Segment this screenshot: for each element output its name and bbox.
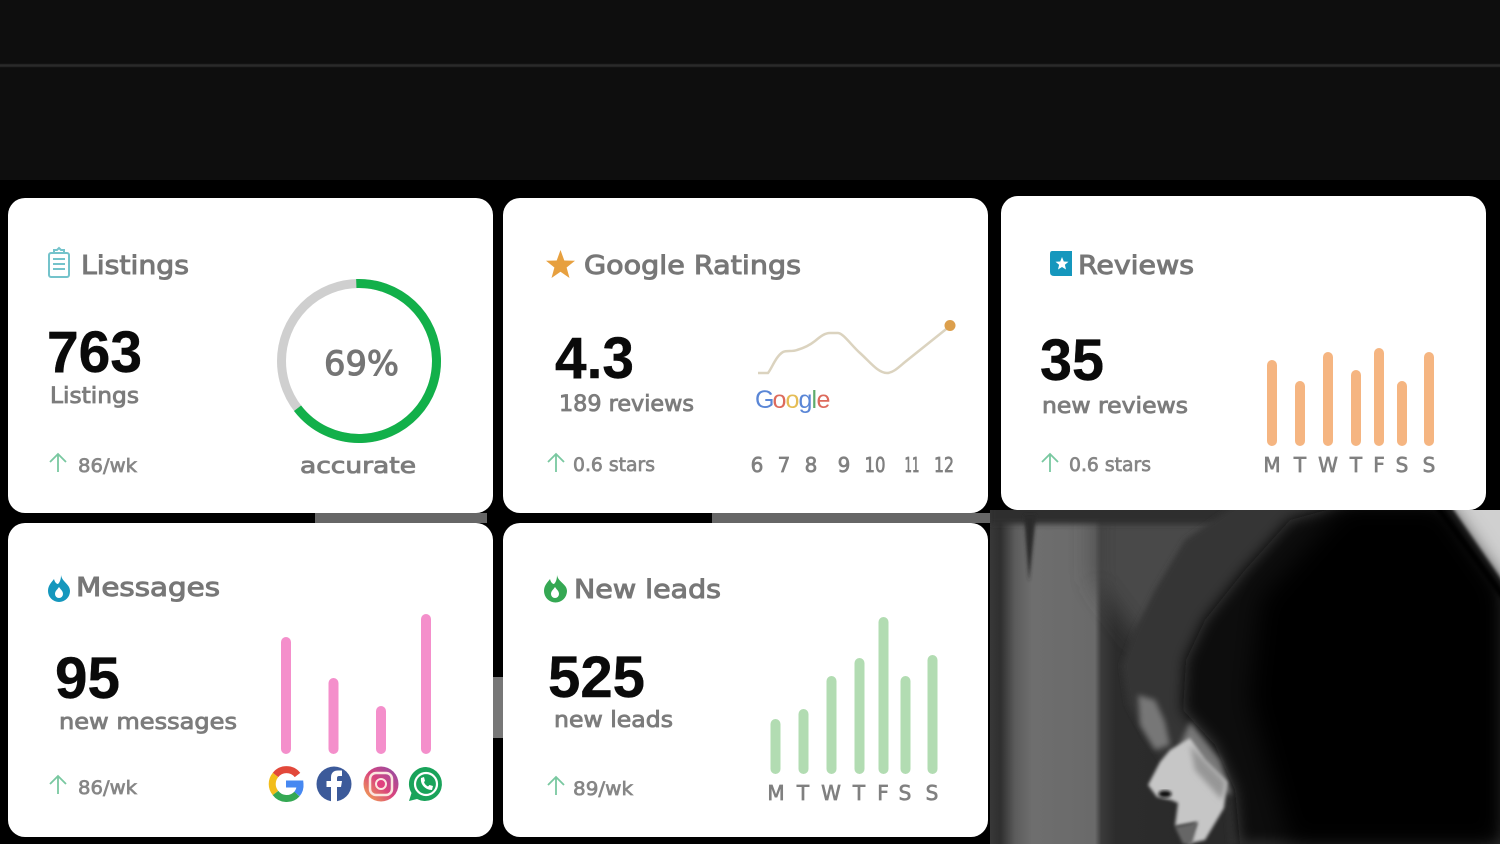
panel: new leads xyxy=(503,523,988,837)
heading: reviews: Reviews xyxy=(1078,251,1194,281)
panel: listings xyxy=(8,198,493,513)
metric: 525: 525 xyxy=(548,645,645,710)
metric label: new reviews: new reviews xyxy=(1042,394,1188,419)
donut chart: 69% accurate: 69% xyxy=(324,344,399,384)
trend: 89/wk: 89/wk xyxy=(573,778,633,800)
axis labels: weekdays: F xyxy=(1373,453,1385,477)
axis labels: weekdays: M xyxy=(1263,453,1281,477)
axis labels: weekdays: F xyxy=(877,781,889,805)
axis labels: weekdays: M xyxy=(767,781,785,805)
icon: green flame xyxy=(544,575,567,602)
background strips behind cards xyxy=(315,513,992,738)
axis labels: months: 12 xyxy=(934,453,954,477)
axis labels: months: 6 xyxy=(751,453,763,477)
axis labels: weekdays: W xyxy=(1318,453,1338,477)
axis labels: weekdays: S xyxy=(1423,453,1435,477)
icon: google xyxy=(272,770,300,799)
axis labels: weekdays: S xyxy=(899,781,911,805)
icon: star xyxy=(546,250,575,278)
axis labels: weekdays xyxy=(1263,453,1435,477)
axis labels: weekdays: T xyxy=(852,781,866,805)
heading: messages: Messages xyxy=(76,573,220,603)
donut caption: accurate xyxy=(300,454,416,479)
axis labels: months: 10 xyxy=(864,453,886,477)
arrow up xyxy=(1042,454,1058,472)
bar chart: weekly leads xyxy=(770,617,938,774)
trend: 86/wk: 86/wk xyxy=(78,777,137,799)
arrow up xyxy=(50,776,66,794)
panel: google ratings xyxy=(503,198,988,513)
panel: reviews xyxy=(1001,196,1486,510)
icon: blue flame xyxy=(48,575,70,602)
axis labels: months: 8 xyxy=(805,453,817,477)
trend: 0.6 stars: 0.6 stars xyxy=(1069,454,1151,476)
photo: woman in profile, greyscale xyxy=(990,500,1500,844)
logo: google wordmark: Google xyxy=(755,386,830,414)
axis labels: weekdays: S xyxy=(1396,453,1408,477)
trend: 86/wk: 86/wk xyxy=(78,455,137,477)
lower black background xyxy=(0,180,1500,844)
line chart: rating trend xyxy=(758,320,956,373)
donut chart: 69% accurate xyxy=(279,281,439,441)
arrow up xyxy=(548,777,564,795)
metric: 95: 95 xyxy=(55,646,120,711)
metric label: listings: Listings xyxy=(50,384,139,409)
axis labels: months xyxy=(751,453,954,477)
metric label: new messages: new messages xyxy=(59,710,237,735)
axis labels: weekdays: T xyxy=(796,781,810,805)
bar chart: weekly reviews xyxy=(1267,348,1434,446)
top dark banner xyxy=(0,0,1500,180)
metric: 35: 35 xyxy=(1040,328,1104,393)
axis labels: months: 7 xyxy=(778,453,790,477)
icon: review book xyxy=(1050,251,1072,276)
arrow up xyxy=(548,454,564,472)
metric: 4.3: 4.3 xyxy=(555,326,634,391)
axis labels: months: 11 xyxy=(904,453,920,477)
metric label: 189 reviews: 189 reviews xyxy=(559,392,694,417)
axis labels: weekdays: T xyxy=(1349,453,1363,477)
axis labels: weekdays xyxy=(767,781,938,805)
arrow up xyxy=(50,454,66,472)
icon: facebook xyxy=(316,766,352,802)
icon: clipboard xyxy=(49,248,69,277)
axis labels: months: 9 xyxy=(838,453,850,477)
axis labels: weekdays: T xyxy=(1293,453,1307,477)
axis labels: weekdays: S xyxy=(926,781,938,805)
icon: instagram xyxy=(364,766,398,802)
bar chart: messages by channel xyxy=(281,614,431,754)
heading: google ratings: Google Ratings xyxy=(584,251,801,281)
icon: whatsapp xyxy=(409,767,442,801)
metric: 763: 763 xyxy=(47,320,142,385)
metric label: new leads: new leads xyxy=(554,708,673,733)
heading: listings: Listings xyxy=(81,251,189,281)
axis labels: weekdays: W xyxy=(821,781,841,805)
panel: messages xyxy=(8,523,493,837)
heading: new leads: New leads xyxy=(574,575,721,605)
trend: 0.6 stars: 0.6 stars xyxy=(573,454,655,476)
